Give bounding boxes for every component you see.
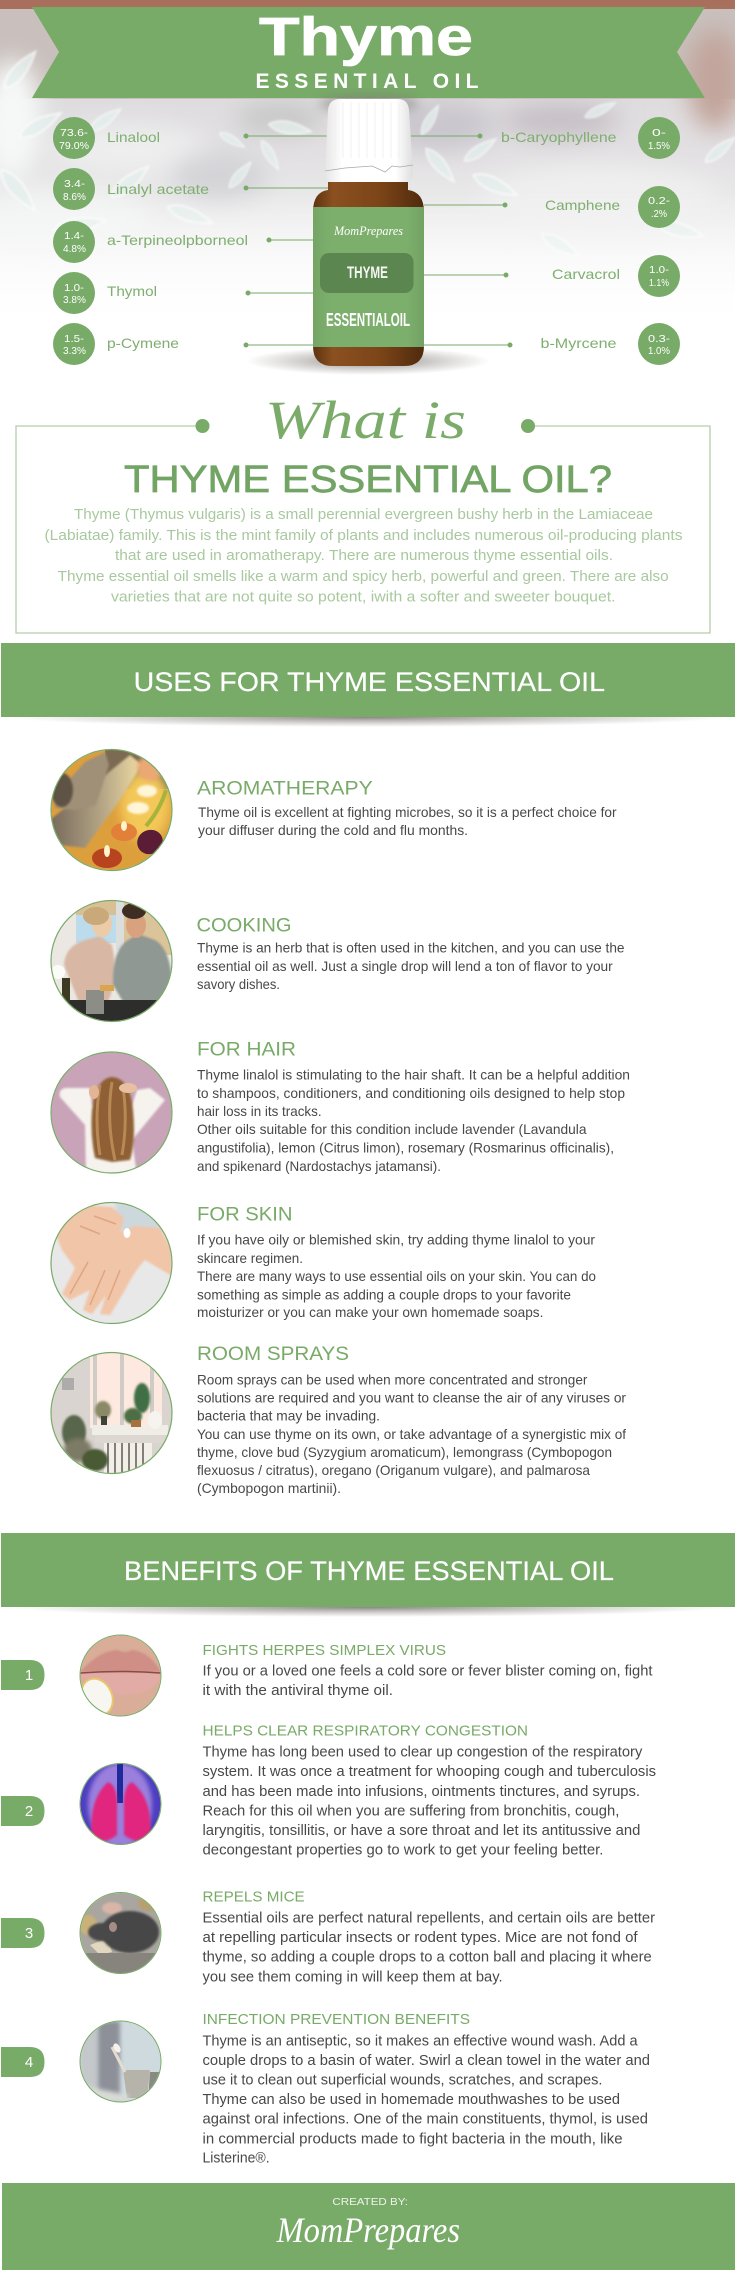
- description: and has been made into infusions, ointments tinctures, and syrups.: [202, 1783, 640, 1800]
- constituent: b-Caryophyllene: b-Caryophyllene: [501, 129, 617, 145]
- constituent: p-Cymene: 3.3%: [63, 345, 86, 357]
- constituent: b-Myrcene: 1.0%: [648, 345, 670, 357]
- bottle shadow: [246, 347, 490, 375]
- benefit 3: repels mice: [1, 1889, 655, 1985]
- description: Other oils suitable for this condition include lavender (Lavandula: [197, 1121, 587, 1137]
- description: [197, 1372, 626, 1496]
- photo: mouse: [79, 1892, 166, 1974]
- created by label: CREATED BY:: [332, 2196, 408, 2208]
- description: in commercial products made to fight bacteria in the mouth, like: [202, 2130, 623, 2147]
- essential oil bottle illustration: [313, 94, 424, 366]
- constituent: Carvacrol: [552, 255, 680, 297]
- description: and spikenard (Nardostachys jatamansi).: [197, 1158, 441, 1174]
- number tab 2: [1, 1796, 44, 1826]
- description: Essential oils are perfect natural repellents, and certain oils are better: [202, 1909, 655, 1926]
- constituent: b-Myrcene: 0.3-: [648, 333, 671, 345]
- constituent: Linalool: [53, 117, 160, 159]
- number tab 3: [1, 1918, 44, 1948]
- number tab 2: 2: [25, 1803, 33, 1820]
- constituent: b-Myrcene: b-Myrcene: [540, 335, 617, 351]
- constituent: Linalool: Linalool: [107, 129, 160, 145]
- essential oil label text: ESSENTIALOIL: [326, 310, 410, 330]
- heading: HELPS CLEAR RESPIRATORY CONGESTION: [202, 1723, 528, 1740]
- photo: bright room with plants: [50, 1352, 174, 1475]
- title: Thyme: Thyme: [259, 7, 473, 67]
- benefit 1: herpes simplex: [1, 1635, 653, 1721]
- description: moisturizer or you can make your own homemade soaps.: [197, 1304, 543, 1320]
- constituent: Thymol: Thymol: [107, 283, 157, 299]
- footer credit: [2, 2183, 735, 2270]
- section banner: benefits: BENEFITS OF THYME ESSENTIAL OIL: [124, 1556, 614, 1586]
- description: at repelling particular insects or rodent types. Mice are not fond of: [202, 1929, 638, 1946]
- heading: INFECTION PREVENTION BENEFITS: [202, 2011, 470, 2028]
- description: [202, 1744, 656, 1859]
- name plate text: THYME: [347, 264, 388, 282]
- benefit 4: infection prevention: [1, 2011, 650, 2167]
- description: [202, 2033, 650, 2167]
- constituent: Camphene: [545, 186, 680, 228]
- description: Thyme has long been used to clear up congestion of the respiratory: [202, 1744, 643, 1761]
- constituent: Carvacrol: 1.1%: [649, 277, 669, 289]
- description: use it to clean out superficial wounds, scratches, and scrapes.: [202, 2072, 602, 2089]
- photo: towels and candles: [50, 749, 175, 871]
- use: for skin: [50, 1202, 596, 1324]
- heading: Thyme Essential Oil?: THYME ESSENTIAL OIL?: [124, 459, 612, 501]
- constituent: Linalyl acetate: Linalyl acetate: [107, 181, 209, 197]
- section banner: uses: USES FOR THYME ESSENTIAL OIL: [134, 667, 605, 697]
- description: [197, 1067, 630, 1174]
- bottle label: [313, 207, 424, 347]
- constituent: Linalool: 79.0%: [59, 140, 89, 152]
- white cap: [325, 99, 413, 182]
- number tab 4: [1, 2047, 44, 2077]
- description: If you have oily or blemished skin, try adding thyme linalol to your: [197, 1232, 595, 1248]
- photo: lungs: [80, 1763, 161, 1847]
- bottle body: [313, 182, 424, 366]
- intro paragraph: that are used in aromatherapy. There are numerous thyme essential oils.: [115, 547, 613, 564]
- constituent: Thymol: [53, 272, 157, 314]
- description: laryngitis, tonsillitis, or have a sore throat and let its antitussive and: [202, 1822, 640, 1839]
- title ribbon banner: [32, 7, 705, 98]
- constituent: p-Cymene: 1.5-: [64, 333, 85, 345]
- description: thyme, clove bud (Syzygium aromaticum), lemongrass (Cymbopogon: [197, 1444, 612, 1460]
- description: it with the antiviral thyme oil.: [202, 1682, 393, 1699]
- description: Thyme is an antiseptic, so it makes an effective wound wash. Add a: [202, 2033, 638, 2050]
- description: [197, 940, 625, 992]
- description: angustifolia), lemon (Citrus limon), rosemary (Rosmarinus officinalis),: [197, 1140, 614, 1156]
- intro paragraph: [44, 506, 682, 606]
- description: Listerine®.: [202, 2150, 270, 2167]
- description: If you or a loved one feels a cold sore or fever blister coming on, fight: [202, 1663, 653, 1680]
- description: [202, 1909, 655, 1985]
- number tab 3: 3: [25, 1925, 33, 1942]
- description: against oral infections. One of the main constituents, thymol, is used: [202, 2111, 648, 2128]
- heading: FIGHTS HERPES SIMPLEX VIRUS: [202, 1642, 446, 1659]
- description: solutions are required and you want to cleanse the air of any viruses or: [197, 1390, 626, 1406]
- constituent: Camphene: .2%: [651, 208, 667, 220]
- description: hair loss in its tracks.: [197, 1103, 322, 1119]
- section banner: uses: [1, 643, 735, 727]
- description: essential oil as well. Just a single drop will lend a ton of flavor to your: [197, 958, 613, 974]
- use: for hair: [50, 1040, 630, 1175]
- photo: couple cooking: [50, 900, 174, 1022]
- constituent: Linalool: 73.6-: [60, 127, 89, 139]
- benefit 2: respiratory congestion: [1, 1723, 656, 1859]
- description: you see them coming in will keep them at bay.: [202, 1968, 503, 1985]
- constituent: Carvacrol: 1.0-: [649, 264, 670, 276]
- description: something as simple as adding a couple drops to your favorite: [197, 1286, 571, 1302]
- constituent: Carvacrol: Carvacrol: [552, 266, 620, 282]
- description: There are many ways to use essential oils on your skin. You can do: [197, 1268, 596, 1284]
- constituent: Camphene: Camphene: [545, 197, 620, 213]
- brand on label: MomPrepares: [333, 223, 403, 238]
- description: decongestant properties go to work to get your feeling better.: [202, 1842, 603, 1859]
- constituent: a-Terpineolpborneol: 4.8%: [63, 243, 86, 255]
- constituent: b-Caryophyllene: 0-: [652, 127, 667, 139]
- description: Reach for this oil when you are suffering from bronchitis, cough,: [202, 1803, 619, 1820]
- description: skincare regimen.: [197, 1250, 303, 1266]
- intro paragraph: Thyme (Thymus vulgaris) is a small perennial evergreen bushy herb in the Lamiaceae: [74, 506, 653, 523]
- description: Thyme can also be used in homemade mouthwashes to be used: [202, 2091, 620, 2108]
- heading: FOR SKIN: [197, 1205, 292, 1226]
- intro paragraph: Thyme essential oil smells like a warm and spicy herb, powerful and green. There are also: [58, 568, 669, 585]
- heading: AROMATHERAPY: [197, 778, 373, 800]
- section banner: benefits: [1, 1533, 735, 1617]
- thyme name plate: [320, 253, 414, 293]
- constituent: a-Terpineolpborneol: 1.4-: [64, 230, 85, 242]
- description: system. It was once a treatment for whooping cough and tuberculosis: [202, 1763, 656, 1780]
- number tab 1: [1, 1660, 44, 1690]
- header background: blurred thyme foliage photo: [0, 0, 735, 345]
- constituent: Linalyl acetate: [53, 168, 209, 210]
- constituent: b-Caryophyllene: 1.5%: [648, 140, 670, 152]
- description: You can use thyme on its own, or take advantage of a synergistic mix of: [197, 1426, 626, 1442]
- heading: ROOM SPRAYS: [197, 1344, 349, 1365]
- description: Thyme is an herb that is often used in the kitchen, and you can use the: [197, 940, 625, 956]
- use: room sprays: [50, 1344, 626, 1496]
- constituent: Thymol: 3.8%: [63, 294, 86, 306]
- description: [197, 1232, 596, 1320]
- constituent: Linalyl acetate: 3.4-: [64, 178, 86, 190]
- heading: FOR HAIR: [197, 1040, 296, 1061]
- brand script logo: MomPrepares: [276, 2210, 460, 2250]
- heading: REPELS MICE: [202, 1889, 305, 1906]
- constituent: a-Terpineolpborneol: [53, 221, 248, 263]
- script heading: What is: What is: [265, 390, 466, 450]
- photo: toothbrush cup: [80, 2021, 161, 2103]
- number tab 4: 4: [25, 2054, 33, 2071]
- constituent: p-Cymene: p-Cymene: [107, 335, 179, 351]
- constituent: Camphene: 0.2-: [648, 195, 671, 207]
- description: Thyme oil is excellent at fighting microbes, so it is a perfect choice for: [198, 804, 617, 820]
- constituent: a-Terpineolpborneol: a-Terpineolpborneol: [107, 232, 248, 248]
- description: couple drops to a basin of water. Swirl a clean towel in the water and: [202, 2052, 650, 2069]
- description: to shampoos, conditioners, and conditioning oils designed to help stop: [197, 1085, 625, 1101]
- constituent: b-Myrcene: [540, 323, 680, 365]
- description: thyme, so adding a couple drops to a cotton ball and placing it where: [202, 1949, 652, 1966]
- photo: lips: [75, 1635, 161, 1721]
- description: flexuosus / citratus), oregano (Origanum vulgare), and palmarosa: [197, 1462, 590, 1478]
- subtitle: Essential Oil: ESSENTIAL OIL: [256, 70, 479, 93]
- use: cooking: [50, 900, 625, 1022]
- description: Room sprays can be used when more concentrated and stronger: [197, 1372, 588, 1388]
- heading: COOKING: [196, 916, 292, 937]
- description: [198, 804, 617, 838]
- description: Thyme linalol is stimulating to the hair shaft. It can be a helpful addition: [197, 1067, 630, 1083]
- panel: what is thyme essential oil: [16, 390, 710, 633]
- intro paragraph: varieties that are not quite so potent, iwith a softer and sweeter bouquet.: [111, 588, 616, 606]
- photo: woman with long hair: [50, 1052, 174, 1175]
- use: aromatherapy: [50, 749, 617, 871]
- intro paragraph: (Labiatae) family. This is the mint family of plants and includes numerous oil-producing plants: [44, 527, 682, 544]
- constituent: Linalyl acetate: 8.6%: [63, 191, 86, 203]
- connector lines from bottle to constituents: [244, 134, 512, 348]
- constituent: b-Caryophyllene: [501, 117, 680, 159]
- number tab 1: 1: [25, 1667, 33, 1684]
- description: your diffuser during the cold and flu months.: [198, 822, 468, 838]
- description: [202, 1663, 653, 1699]
- description: savory dishes.: [197, 976, 280, 992]
- constituent: Thymol: 1.0-: [64, 282, 85, 294]
- constituent: p-Cymene: [53, 323, 179, 365]
- description: bacteria that may be invading.: [197, 1408, 380, 1424]
- photo: hand applying cream: [50, 1202, 175, 1324]
- description: (Cymbopogon martinii).: [197, 1480, 341, 1496]
